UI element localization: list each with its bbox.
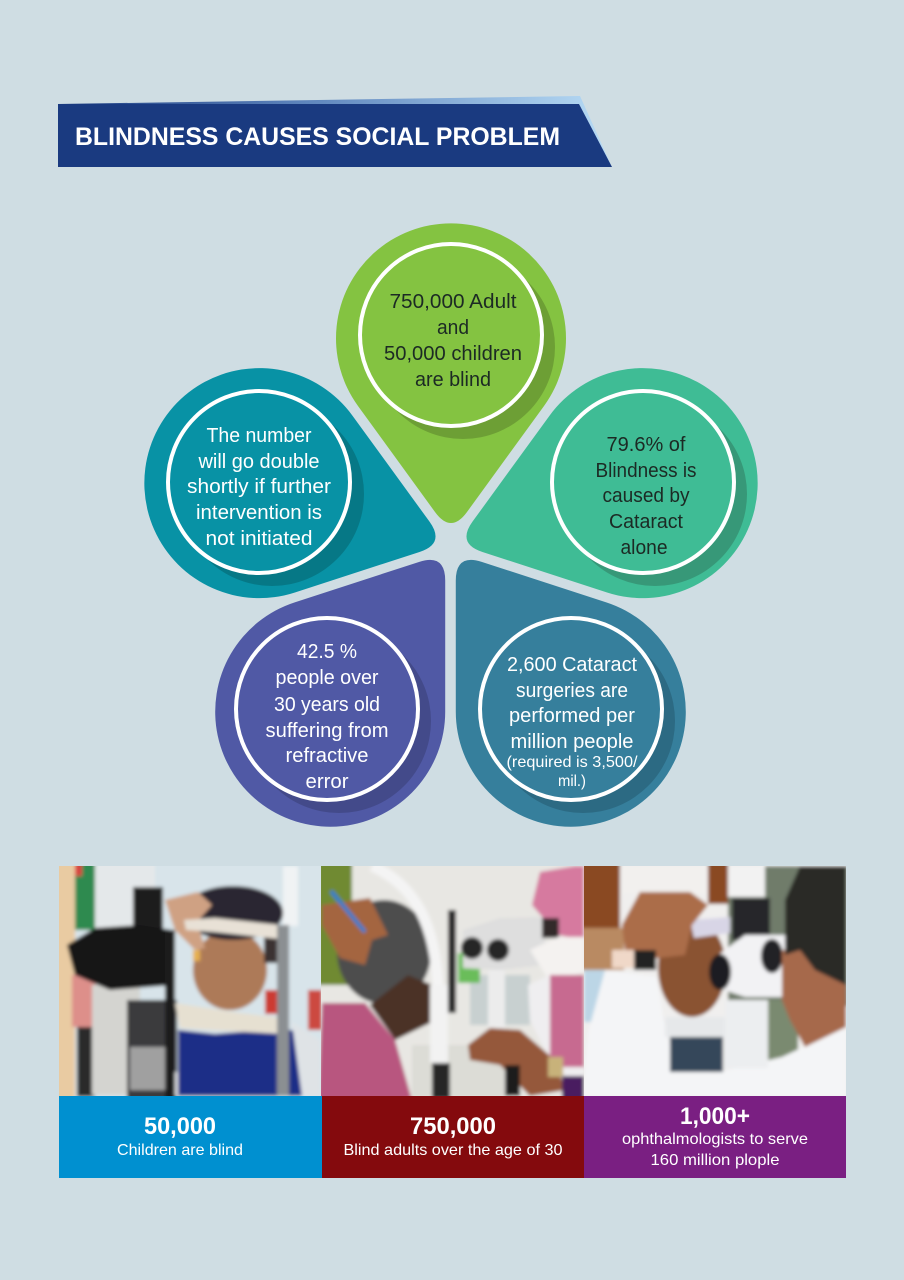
panel: pin purple, refractive error [170,495,532,872]
caption: ophthalmologists: ophthalmologists to serve [622,1131,808,1148]
panel: pin blue, surgeries [369,495,731,872]
text cyan: intervention is [196,502,322,524]
text blue: surgeries are [516,680,628,702]
text purple: people over [276,667,379,689]
text teal: caused by [602,485,690,507]
caption: ophthalmologists [584,1096,846,1178]
text teal: Blindness is [596,460,696,482]
caption: ophthalmologists: 1,000+ [680,1103,750,1130]
caption: children: 50,000 [144,1113,216,1140]
text green: and [437,317,469,339]
text cyan: shortly if further [187,476,331,498]
caption: adults: 750,000 [410,1113,496,1140]
photo: elderly man and doctor [318,860,588,1100]
text green: are blind [415,369,491,391]
text purple: refractive [286,745,368,767]
pin shape blue [369,495,731,872]
caption: adults [322,1096,584,1178]
text cyan [187,425,331,550]
text teal: 79.6% of [606,434,686,456]
caption: ophthalmologists: 160 million plople [650,1152,780,1169]
shadow circle purple [247,629,431,813]
shadow circle teal [563,402,747,586]
text teal: alone [620,537,668,559]
text cyan: not initiated [206,528,312,550]
ring purple [236,618,418,800]
text cyan: will go double [198,451,320,473]
caption: children [59,1096,322,1178]
text purple: 42.5 % [297,641,357,663]
panel: pin teal, cataract share [432,338,788,650]
ring cyan [168,391,350,573]
title: BLINDNESS CAUSES SOCIAL PROBLEM [75,123,560,151]
text blue [506,654,638,790]
pin shape green [336,223,566,523]
text teal [596,434,696,559]
shadow circle blue [491,629,675,813]
panel: pin green, blind population [336,223,566,523]
pin shape purple [170,495,532,872]
photo: doctor examining patient [580,860,850,1100]
text blue: (required is 3,500/ [506,754,638,771]
ring blue [480,618,662,800]
caption: adults: Blind adults over the age of 30 [344,1142,563,1159]
text green: 50,000 children [384,343,522,365]
shadow circle green [371,255,555,439]
ring green [360,244,542,426]
text blue: million people [510,731,634,753]
text purple: 30 years old [274,694,380,716]
text purple [266,641,388,793]
text blue: 2,600 Cataract [507,654,637,676]
text blue: mil.) [558,773,586,790]
text blue: performed per [509,705,635,727]
ring teal [552,391,734,573]
panel: pin cyan, future doubling [114,338,470,650]
text green: 750,000 Adult [390,291,517,313]
caption: children: Children are blind [117,1142,243,1159]
text purple: suffering from [266,720,388,742]
text purple: error [306,771,349,793]
pin shape teal [432,338,788,650]
title banner [58,96,612,167]
photo: boy at slit lamp [55,860,325,1100]
shadow circle cyan [180,402,364,586]
text green [384,291,522,391]
pin shape cyan [114,338,470,650]
text teal: Cataract [609,511,683,533]
text cyan: The number [206,425,312,447]
